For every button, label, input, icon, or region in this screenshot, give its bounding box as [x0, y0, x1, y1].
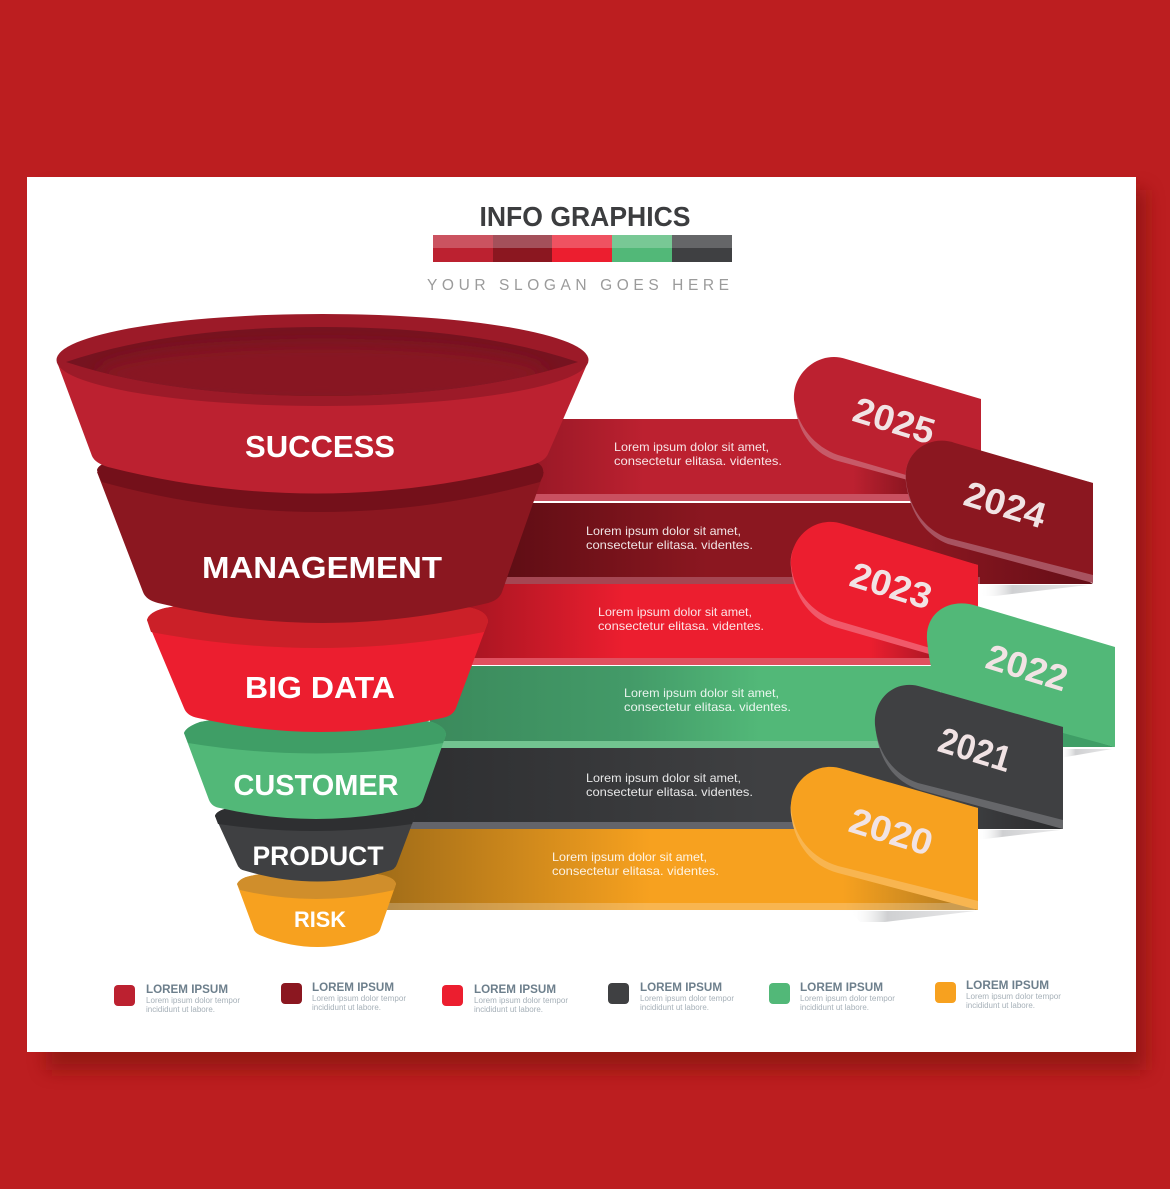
funnel segment: product: PRODUCT — [252, 841, 384, 871]
funnel segment: big data — [147, 594, 488, 732]
legend item 4 — [608, 980, 734, 1012]
legend item 5: incididunt ut labore. — [800, 1003, 869, 1012]
legend item 4: incididunt ut labore. — [640, 1003, 709, 1012]
band and tab 2020: Lorem ipsum dolor sit amet, — [552, 850, 707, 864]
legend item 4: LOREM IPSUM — [640, 980, 722, 994]
funnel segment: customer — [184, 711, 446, 819]
band and tab 2025: 2025 — [848, 389, 940, 452]
legend item 3 — [442, 982, 568, 1014]
funnel segment: risk — [237, 869, 396, 947]
colour strip — [433, 235, 732, 262]
band and tab 2024: 2024 — [959, 473, 1051, 536]
band and tab 2023: Lorem ipsum dolor sit amet, — [598, 605, 752, 619]
legend item 2: LOREM IPSUM — [312, 980, 394, 994]
band and tab 2022: consectetur elitasa. videntes. — [624, 700, 791, 714]
funnel segment: success: SUCCESS — [245, 429, 395, 464]
legend item 5: Lorem ipsum dolor tempor — [800, 994, 895, 1003]
band and tab 2025 — [530, 357, 981, 503]
legend item 1: Lorem ipsum dolor tempor — [146, 996, 240, 1005]
band and tab 2023: 2023 — [845, 554, 937, 617]
legend item 6: incididunt ut labore. — [966, 1001, 1035, 1010]
band and tab 2022: 2022 — [981, 636, 1073, 699]
funnel segment: management — [97, 462, 544, 623]
band and tab 2025: consectetur elitasa. videntes. — [614, 454, 782, 468]
funnel segment: risk: RISK — [294, 907, 346, 932]
band and tab 2023: consectetur elitasa. videntes. — [598, 619, 764, 633]
legend item 6: LOREM IPSUM — [966, 978, 1049, 992]
band and tab 2021: consectetur elitasa. videntes. — [586, 785, 753, 799]
band and tab 2022 — [430, 603, 1115, 758]
legend item 3: Lorem ipsum dolor tempor — [474, 996, 568, 1005]
legend item 2 — [281, 980, 406, 1012]
band and tab 2020: 2020 — [845, 799, 938, 864]
band and tab 2021 — [395, 685, 1063, 839]
band and tab 2025: Lorem ipsum dolor sit amet, — [614, 440, 769, 454]
legend item 4: Lorem ipsum dolor tempor — [640, 994, 734, 1003]
band and tab 2024: Lorem ipsum dolor sit amet, — [586, 524, 741, 538]
legend item 6 — [935, 978, 1061, 1010]
legend item 1: LOREM IPSUM — [146, 982, 228, 996]
funnel segment: management: MANAGEMENT — [202, 550, 442, 585]
band and tab 2023 — [460, 522, 978, 668]
band and tab 2022: Lorem ipsum dolor sit amet, — [624, 686, 779, 700]
legend item 3: LOREM IPSUM — [474, 982, 556, 996]
band and tab 2020 — [375, 767, 978, 922]
legend item 1: incididunt ut labore. — [146, 1005, 215, 1014]
funnel segment: success — [56, 314, 588, 494]
legend item 5 — [769, 980, 895, 1012]
slogan: YOUR SLOGAN GOES HERE — [427, 277, 729, 294]
legend item 6: Lorem ipsum dolor tempor — [966, 992, 1061, 1001]
band and tab 2020: consectetur elitasa. videntes. — [552, 864, 719, 878]
band and tab 2021: Lorem ipsum dolor sit amet, — [586, 771, 741, 785]
band and tab 2021: 2021 — [934, 719, 1017, 780]
title: INFO GRAPHICS — [480, 201, 690, 232]
band and tab 2024 — [490, 441, 1093, 596]
white panel — [27, 177, 1136, 1052]
legend item 5: LOREM IPSUM — [800, 980, 883, 994]
funnel segment: big data: BIG DATA — [245, 670, 395, 705]
legend item 3: incididunt ut labore. — [474, 1005, 543, 1014]
legend item 1 — [114, 982, 240, 1014]
funnel segment: customer: CUSTOMER — [234, 770, 399, 802]
legend item 2: incididunt ut labore. — [312, 1003, 381, 1012]
band and tab 2024: consectetur elitasa. videntes. — [586, 538, 753, 552]
legend item 2: Lorem ipsum dolor tempor — [312, 994, 406, 1003]
funnel segment: product — [215, 799, 415, 882]
